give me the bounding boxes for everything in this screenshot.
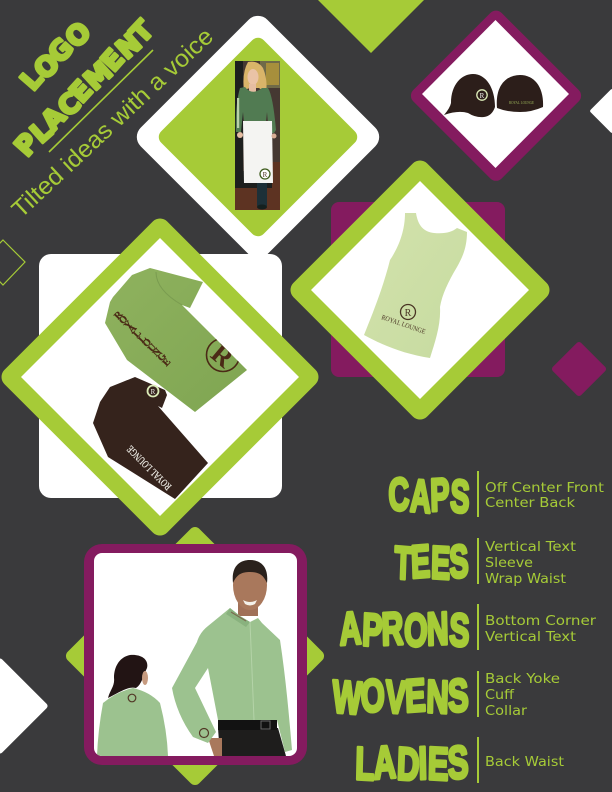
decorative diamond: small purple bbox=[551, 341, 607, 397]
category: aprons: Vertical Text bbox=[485, 630, 576, 645]
decorative diamond: top green bbox=[318, 0, 424, 53]
subtitle: Tilted ideas with a voice bbox=[7, 23, 219, 223]
category: aprons: Bottom Corner bbox=[485, 614, 597, 629]
photo: green tee bbox=[105, 268, 247, 412]
category: caps: Off Center Front bbox=[485, 481, 604, 496]
category: tees: Vertical Text bbox=[485, 540, 576, 555]
title: placement: PLACEMENT bbox=[8, 13, 162, 165]
category: wovens: WOVENS bbox=[331, 669, 469, 724]
category: wovens: Collar bbox=[485, 704, 528, 719]
category: tees: Sleeve bbox=[485, 556, 533, 571]
photo: woman in apron bbox=[235, 61, 280, 210]
category: caps: Center Back bbox=[485, 496, 576, 511]
photo: green tee: R bbox=[205, 338, 240, 374]
photo: green tee: ROYAL LOUNGE bbox=[112, 309, 174, 369]
decorative diamond: bottom-left white bbox=[0, 657, 49, 755]
category: aprons bbox=[338, 602, 597, 656]
photo: caps: ROYAL LOUNGE bbox=[509, 100, 534, 105]
category: ladies bbox=[355, 736, 564, 790]
category: wovens: Cuff bbox=[485, 688, 515, 703]
category: caps bbox=[387, 468, 604, 522]
panel: tees bbox=[0, 214, 323, 540]
category: wovens bbox=[331, 669, 560, 724]
panel: tank diamond bbox=[286, 156, 554, 424]
hair bbox=[244, 62, 267, 93]
photo: brown tee: R bbox=[151, 388, 156, 396]
photo: tank top bbox=[364, 213, 467, 358]
decorative diamond: left outline bbox=[0, 240, 25, 285]
panel: aprons diamond bbox=[131, 10, 385, 264]
title block bbox=[7, 13, 219, 223]
category: tees: Wrap Waist bbox=[485, 572, 566, 587]
photo: tank top: R bbox=[405, 308, 412, 319]
title: logo: LOGO bbox=[14, 15, 99, 99]
photo: caps bbox=[444, 74, 543, 117]
title rule bbox=[49, 50, 153, 152]
photo: tank top: ROYAL LOUNGE bbox=[380, 313, 426, 336]
panel: wovens photo frame bbox=[63, 524, 327, 788]
decorative diamond: right white bbox=[589, 88, 612, 134]
photo: man in green shirt bbox=[172, 560, 292, 756]
photo: woman back view bbox=[97, 655, 168, 756]
photo: woman in apron: R bbox=[263, 171, 268, 179]
category: ladies: Back Waist bbox=[485, 755, 564, 770]
category: tees: TEES bbox=[393, 535, 469, 589]
photo: brown tee: ROYAL LOUNGE bbox=[125, 443, 174, 492]
category: wovens: Back Yoke bbox=[485, 672, 560, 687]
category: caps: CAPS bbox=[387, 468, 472, 522]
panel: caps diamond bbox=[408, 7, 584, 184]
category: aprons: APRONS bbox=[338, 602, 471, 656]
photo: caps: R bbox=[480, 92, 485, 100]
category: ladies: LADIES bbox=[355, 736, 469, 790]
category: tees bbox=[393, 535, 576, 589]
photo: brown tee bbox=[93, 377, 208, 499]
